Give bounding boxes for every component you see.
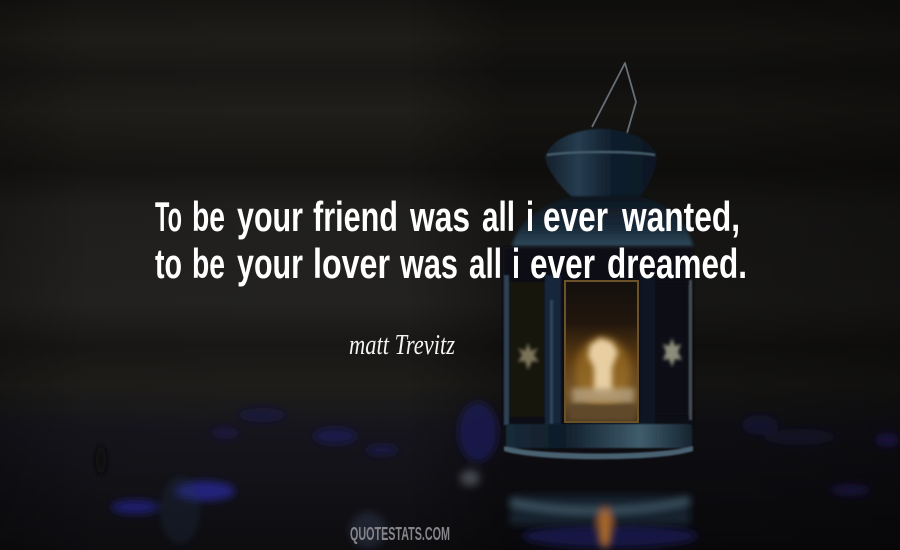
quote line 1: friend [313,193,398,240]
lantern reflection [510,495,690,548]
blue flowers on table [111,402,899,548]
lantern left pane [504,275,561,427]
lantern star reflections [518,338,682,370]
quote line 1: be [192,193,225,240]
icon: lantern [503,63,693,548]
quote line 2: lover [313,240,390,287]
quote line 2: your [237,240,303,287]
quote line 2: all [469,240,502,287]
quote line 2: be [192,240,225,287]
quote line 2: dreamed. [607,240,747,287]
dark specks [96,446,106,474]
quote line 2 [155,240,747,287]
quote line 1: was [409,193,470,240]
quote line 2: to [155,240,182,287]
quote line 1: ever [543,193,608,240]
author signature: matt Trevitz [349,330,455,361]
quote text [155,193,747,287]
lantern body [503,247,693,427]
quote line 2: ever [530,240,595,287]
quote line 2: i [512,240,520,287]
quote line 1: wanted, [621,193,740,240]
lantern handle [592,63,636,147]
quote line 1: your [237,193,303,240]
quote line 1 [155,193,740,240]
lantern cap [545,129,657,197]
quote line 2: was [399,240,458,287]
quote line 1: To [155,193,182,240]
lantern right pane [640,275,692,427]
quote line 1: all [482,193,515,240]
quote line 1: i [526,193,534,240]
lantern centre window with flame [565,281,638,422]
lantern roof [512,197,693,247]
watermark: QUOTESTATS.COM [350,524,450,544]
lantern base [504,424,693,459]
